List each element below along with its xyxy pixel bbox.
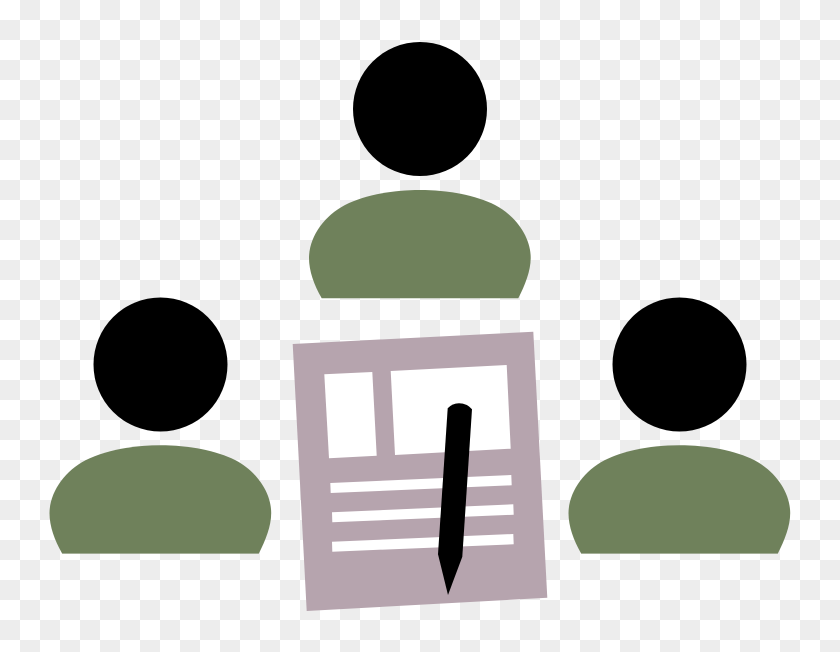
document page: [293, 332, 547, 611]
image placeholder: wide: [391, 365, 511, 455]
head: top person: [353, 42, 487, 176]
image placeholder: narrow: [324, 372, 377, 458]
icon: pencil: [438, 403, 472, 595]
person: top centre: [309, 42, 531, 298]
text line 2: [332, 504, 514, 522]
person: left: [50, 298, 271, 554]
body: right person: [568, 445, 790, 554]
body: top person: [309, 190, 531, 298]
text line 3: [332, 534, 514, 552]
body: left person: [50, 445, 271, 554]
document with pencil: [293, 332, 547, 611]
person: right: [568, 298, 790, 554]
text line 1: [330, 475, 512, 493]
head: right person: [612, 298, 746, 432]
head: left person: [94, 298, 228, 432]
